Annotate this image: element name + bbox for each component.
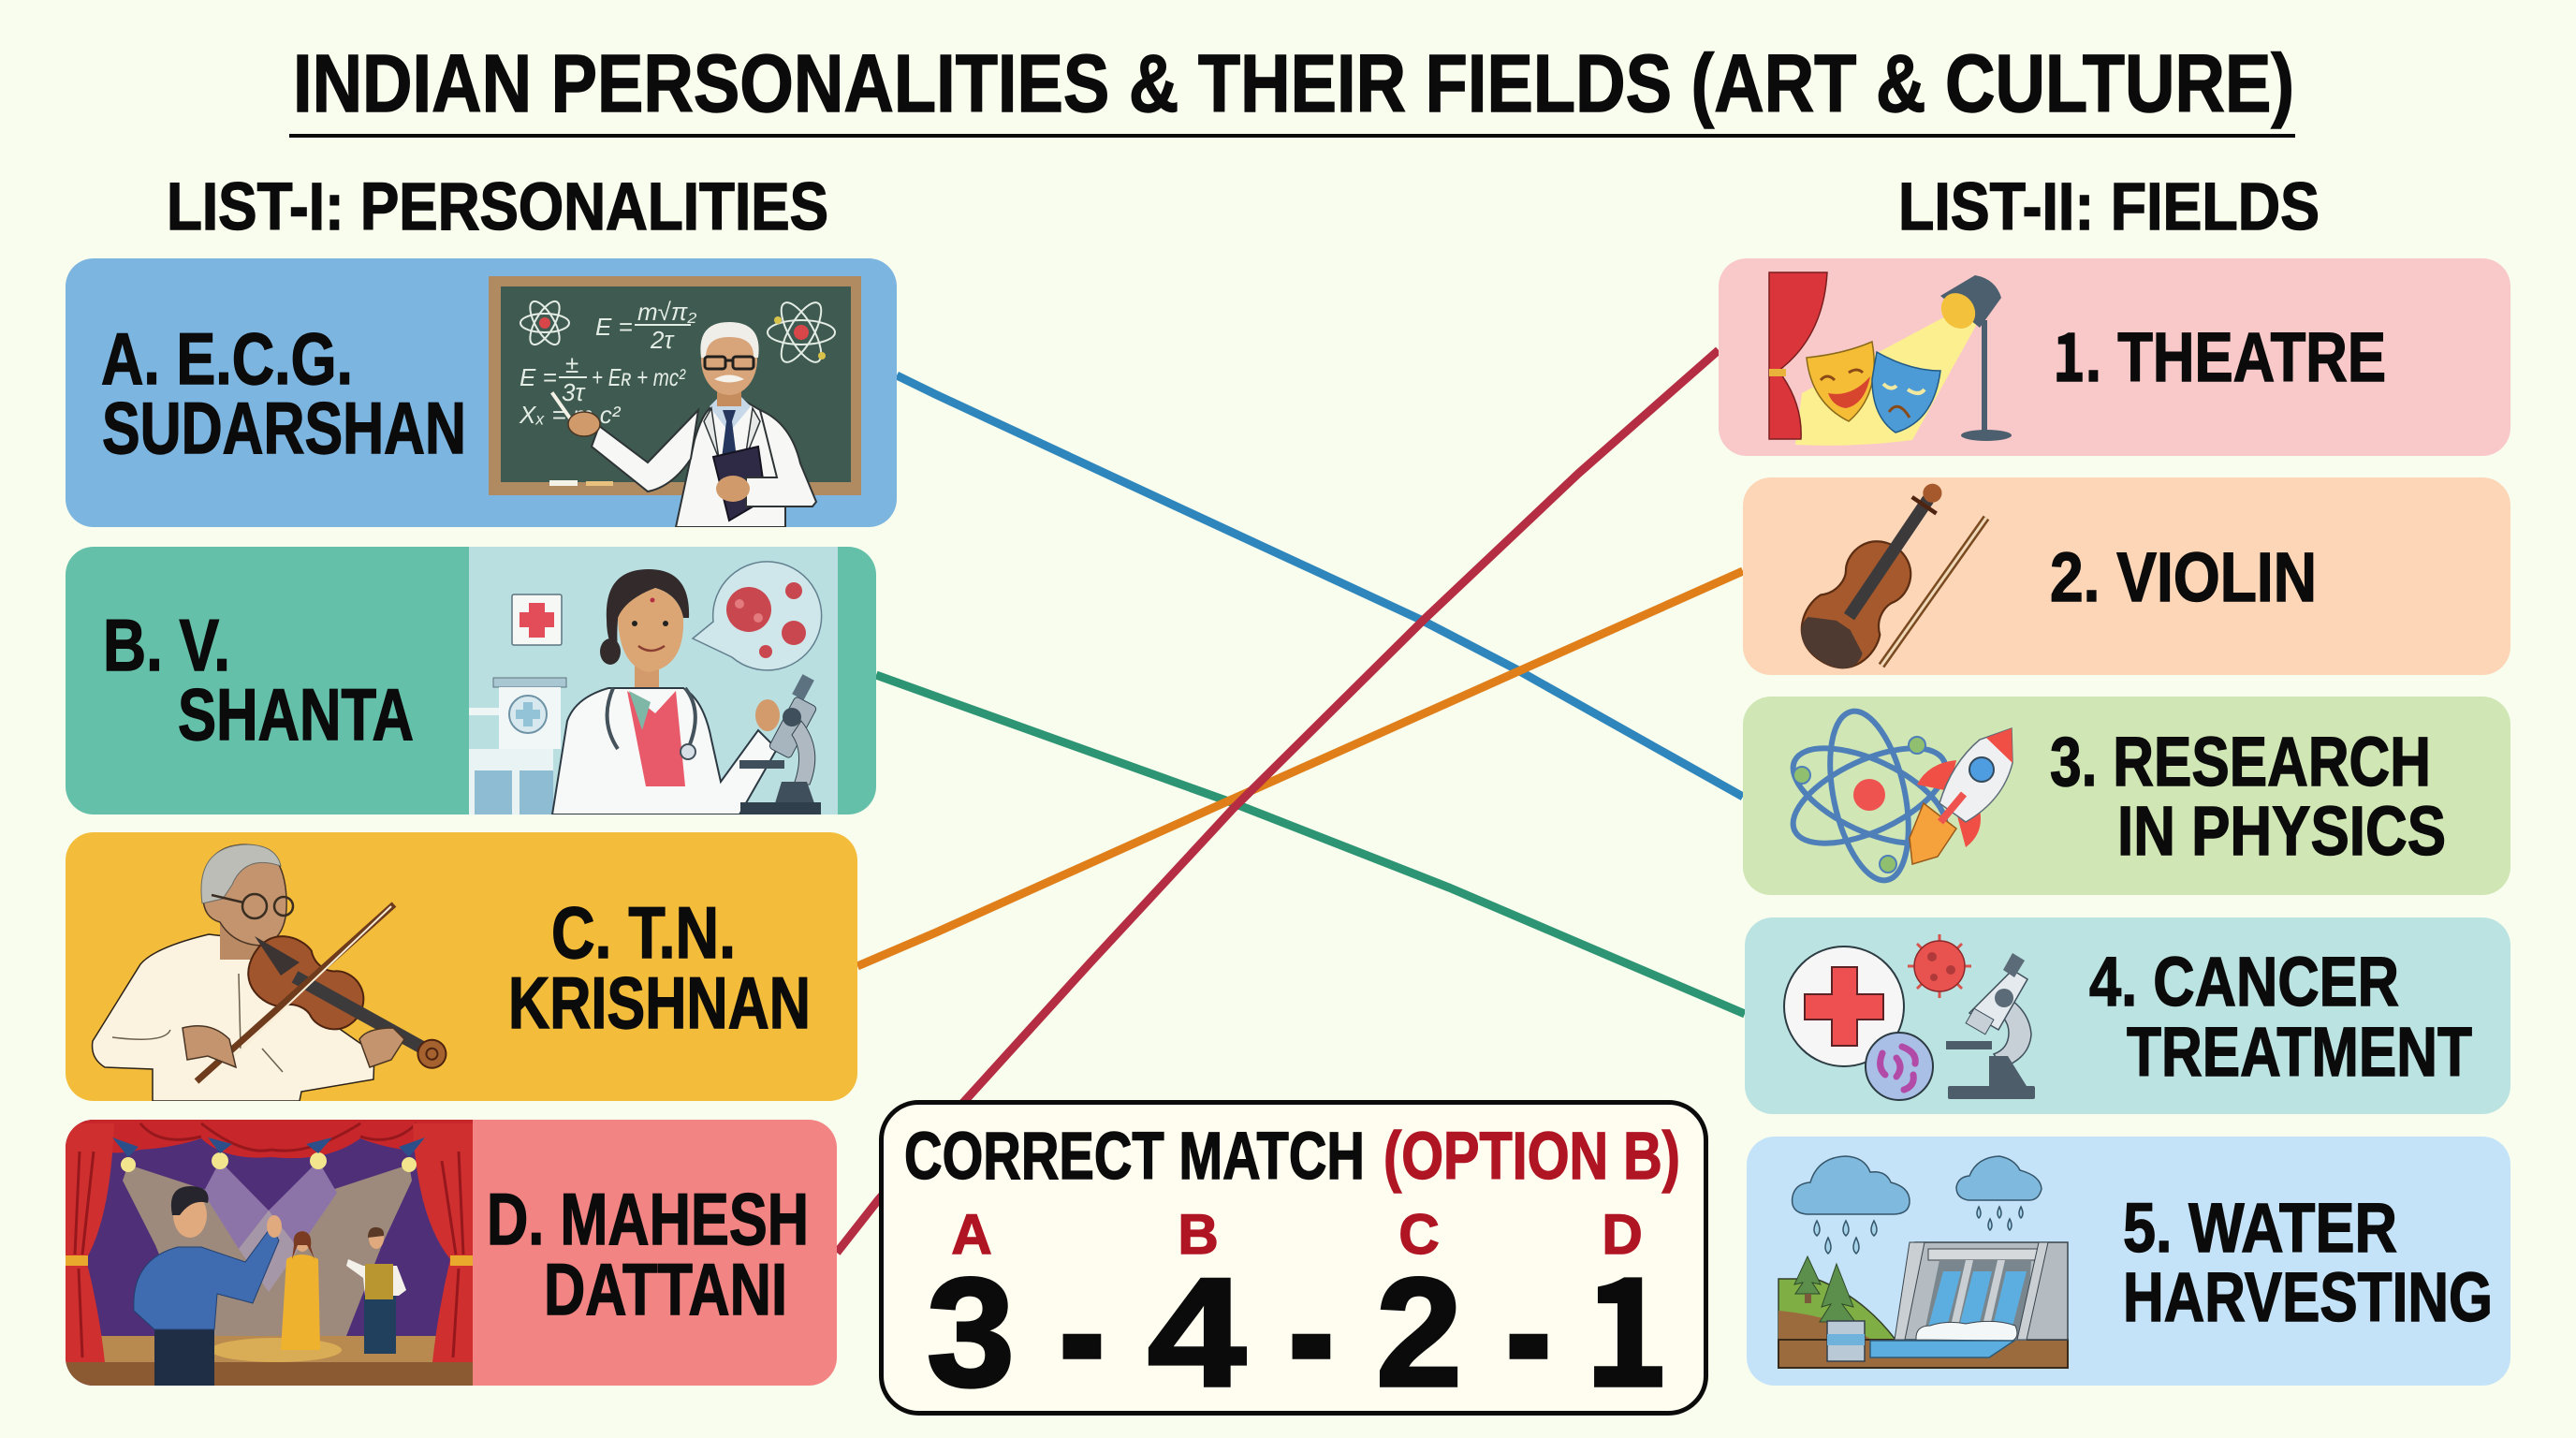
callout heading: CORRECT MATCH (904, 1120, 1365, 1194)
label: A (101, 317, 466, 469)
label: 5: HARVESTING (2123, 1258, 2493, 1336)
icon: physicist at blackboard: 3τ (562, 378, 586, 406)
label: 3 (2050, 723, 2446, 870)
icon: physicist at blackboard: + Eʀ + mc² (592, 363, 686, 391)
label: 4: TREATMENT (2127, 1013, 2472, 1091)
option letters: C (1398, 1203, 1440, 1266)
icon: atom and rocket (1779, 704, 2012, 888)
icon: violinist (93, 844, 461, 1101)
title: INDIAN PERSONALITIES & THEIR FIELDS (ART & CULTURE) (293, 38, 2294, 129)
answer sequence: 1 (1584, 1214, 1670, 1429)
label: B: B. V. (103, 604, 230, 686)
answer sequence: 2 (1376, 1246, 1462, 1418)
label: 5: 5. WATER (2123, 1189, 2397, 1267)
answer sequence (927, 1214, 1670, 1438)
icon: theatre stage (66, 1120, 473, 1386)
callout: correct match (882, 1103, 1705, 1438)
answer sequence: - (1504, 1216, 1553, 1438)
label: 3: IN PHYSICS (2117, 792, 2446, 870)
icon: physicist at blackboard: ± (565, 350, 578, 378)
option letters: B (1178, 1203, 1219, 1266)
icon: physicist at blackboard: Xₓ = m c² (519, 401, 622, 429)
label: C: KRISHNAN (508, 961, 811, 1044)
label: A: SUDARSHAN (102, 387, 466, 469)
connector: B to 4 (green) (876, 675, 1745, 1014)
answer sequence: - (1287, 1216, 1336, 1438)
icon: medical cross, cell, virus and microscope (1784, 934, 2035, 1100)
icon: rain clouds and dam (1778, 1156, 2068, 1368)
connector: A to 3 (blue) (897, 375, 1743, 797)
icon: physicist at blackboard: E = (595, 313, 633, 341)
panel: A. E.C.G. Sudarshan (66, 258, 897, 527)
callout heading: (OPTION B) (1383, 1120, 1680, 1194)
panel: 2. Violin (1743, 463, 2510, 682)
icon: physicist at blackboard (489, 276, 861, 527)
option letters (951, 1203, 1643, 1266)
answer sequence: 3 (927, 1246, 1015, 1418)
label: 1: 1. THEATRE (2053, 305, 2386, 401)
icon: physicist at blackboard: 2τ (650, 326, 675, 354)
panel: 5. Water Harvesting (1747, 1137, 2510, 1386)
panel: C. T.N. Krishnan (66, 832, 857, 1101)
label: 2: 2. VIOLIN (2050, 538, 2317, 616)
icon: doctor with microscope (469, 547, 838, 814)
icon: physicist at blackboard: m√π₂ (637, 298, 696, 326)
label: B: SHANTA (178, 673, 414, 756)
panel: 4. Cancer Treatment (1745, 917, 2510, 1114)
connector: D to 1 (red) (837, 350, 1719, 1253)
icon: masks and spotlight (1769, 272, 2012, 446)
label: B (103, 604, 414, 756)
label: 4 (2089, 943, 2472, 1091)
option letters: D (1602, 1203, 1643, 1266)
panel: 3. Research in Physics (1743, 697, 2510, 895)
answer sequence: - (1058, 1216, 1106, 1438)
icon: violin and bow (1788, 463, 1986, 682)
panel: 1. Theatre (1719, 258, 2510, 456)
answer sequence: 4 (1148, 1246, 1246, 1418)
panel: B. V. Shanta (66, 547, 876, 814)
label: 5 (2123, 1189, 2493, 1336)
label: 4: 4. CANCER (2089, 943, 2399, 1020)
connector: C to 2 (orange) (857, 571, 1743, 966)
label: D (487, 1178, 809, 1330)
label: C (508, 891, 811, 1044)
label: 3: 3. RESEARCH (2050, 723, 2431, 800)
label: A: A. E.C.G. (101, 317, 353, 400)
label: C: C. T.N. (551, 891, 736, 974)
icon: physicist at blackboard: E = (520, 363, 557, 391)
label: D: DATTANI (544, 1248, 787, 1330)
option letters: A (951, 1203, 992, 1266)
panel: D. Mahesh Dattani (66, 1120, 837, 1386)
heading: list I: LIST-I: PERSONALITIES (167, 170, 828, 244)
label: D: D. MAHESH (487, 1178, 809, 1260)
heading: list II: LIST-II: FIELDS (1898, 170, 2320, 244)
